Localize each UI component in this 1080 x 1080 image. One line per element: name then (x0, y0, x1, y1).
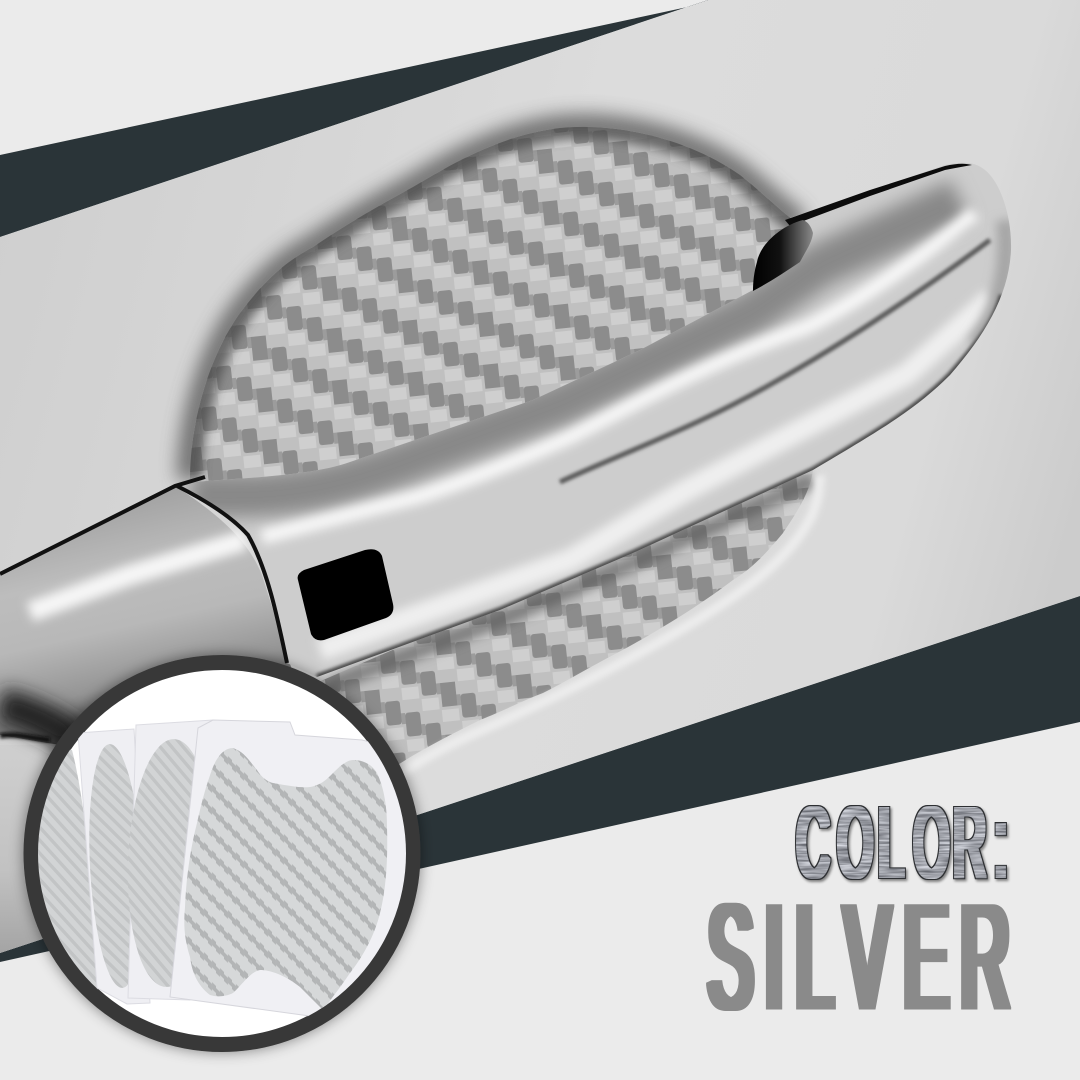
handle lower light band (320, 298, 992, 650)
left door panel lower shade (0, 782, 43, 953)
sheet 4 sticker (184, 748, 387, 1010)
upper cup outer shadow (190, 127, 800, 480)
sheet 3 (128, 720, 212, 1000)
heading: COLOR:: COLOR: (797, 788, 1007, 899)
lower cup highlight rim (395, 475, 820, 778)
upper cup carbon film (190, 127, 800, 490)
inset circle (30, 662, 440, 1044)
sheet 4 (170, 720, 406, 1016)
upper cup inner rim shadow (190, 127, 800, 480)
handle main highlight (262, 213, 975, 537)
bezel black seam (0, 735, 50, 740)
left bezel (0, 486, 292, 745)
handle top black seam (785, 164, 972, 226)
heading: SILVER: SILVER (708, 873, 1009, 1041)
circle contents: film sheets (38, 720, 406, 1016)
handle body (177, 163, 1011, 677)
bottom dark diagonal band (0, 596, 1080, 962)
handle tip shading (975, 220, 1006, 345)
finger recess (753, 220, 813, 291)
bezel dark corner (0, 705, 75, 740)
sheet 1 sticker (38, 750, 98, 990)
lower cup carbon film (300, 468, 813, 780)
circle ring (31, 662, 413, 1044)
handle groove (560, 240, 990, 482)
bezel highlight (30, 540, 245, 612)
bezel seam line (0, 477, 287, 663)
handle lower dark edge (317, 295, 1002, 677)
lock button (298, 549, 393, 640)
sheet 2 (78, 729, 150, 1004)
top dark diagonal band (0, 0, 720, 237)
lower cup dark top shadow (330, 480, 813, 685)
handle top shading (190, 200, 960, 495)
